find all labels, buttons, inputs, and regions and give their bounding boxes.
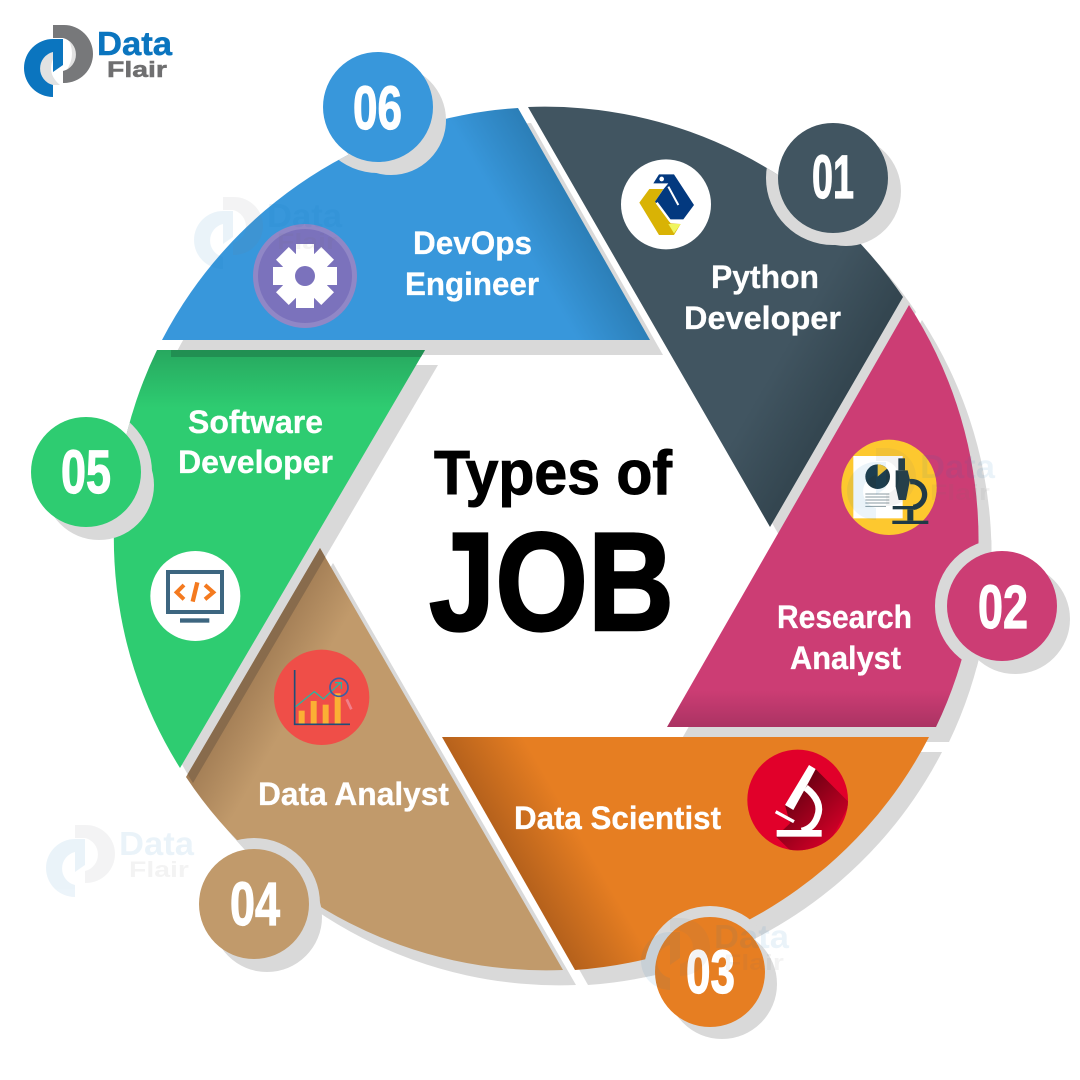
number badge 03 bbox=[644, 906, 777, 1039]
watermark: research bbox=[847, 448, 996, 520]
label: Software Developer: Developer bbox=[178, 444, 333, 480]
label: DevOps Engineer: DevOps bbox=[413, 225, 532, 261]
label: Python Developer: Python bbox=[711, 259, 819, 295]
panel: Data Analyst segment bbox=[186, 548, 563, 970]
number badge 01 bbox=[766, 111, 901, 246]
label: Software Developer bbox=[178, 404, 333, 480]
title: JOB bbox=[429, 503, 674, 660]
panel: DevOps Engineer segment bbox=[162, 108, 650, 340]
number badge 06 bbox=[323, 52, 446, 175]
number badge 05 bbox=[31, 417, 154, 540]
watermark: lower left: Flair bbox=[129, 857, 190, 882]
label: Software Developer: Software bbox=[188, 404, 323, 440]
watermark: lower left bbox=[46, 825, 195, 897]
number badge 02: 02 bbox=[978, 573, 1028, 641]
watermark: research: Flair bbox=[930, 480, 991, 505]
number badge 03: 03 bbox=[686, 938, 735, 1006]
watermark: research: Data bbox=[920, 448, 996, 485]
panel: Python Developer segment bbox=[528, 107, 903, 527]
watermark: DevOps bbox=[194, 197, 343, 269]
number badge 04: 04 bbox=[230, 870, 280, 938]
watermark: DevOps: Data bbox=[267, 197, 343, 234]
watermark: badge 03: Flair bbox=[724, 950, 785, 975]
icon: report and microscope bbox=[841, 440, 937, 535]
panel: Data Scientist segment bbox=[442, 737, 929, 970]
label: Python Developer: Developer bbox=[684, 300, 841, 336]
watermark: badge 03 bbox=[641, 918, 790, 990]
panel: Software Developer segment bbox=[114, 350, 431, 768]
icon: microscope on red circle bbox=[747, 750, 850, 855]
number badge 01: 01 bbox=[812, 143, 854, 211]
number badge 05: 05 bbox=[61, 438, 111, 506]
logo: DataFlair: Flair bbox=[107, 57, 168, 82]
panel: Research Analyst segment bbox=[667, 305, 979, 727]
label: DevOps Engineer bbox=[405, 225, 539, 302]
watermark: DevOps: Flair bbox=[277, 229, 338, 254]
label: Research Analyst: Research bbox=[777, 599, 912, 635]
number badge 06: 06 bbox=[353, 74, 402, 142]
logo: DataFlair: Data bbox=[97, 25, 173, 62]
icon: gear on purple circle bbox=[253, 224, 357, 328]
label: Python Developer bbox=[684, 259, 841, 336]
label: Research Analyst bbox=[777, 599, 912, 676]
logo: DataFlair bbox=[24, 25, 173, 97]
icon: code monitor bbox=[150, 551, 240, 641]
title: Types of bbox=[434, 439, 672, 508]
label: DevOps Engineer: Engineer bbox=[405, 266, 539, 302]
watermark: lower left: Data bbox=[119, 825, 195, 862]
segment shadows bbox=[127, 122, 992, 985]
label: Data Scientist: Data Scientist bbox=[514, 800, 721, 836]
label: Research Analyst: Analyst bbox=[790, 640, 901, 676]
icon: python logo bbox=[621, 159, 711, 249]
number badge 04 bbox=[188, 838, 322, 972]
watermark: badge 03: Data bbox=[714, 918, 790, 955]
label: Data Analyst: Data Analyst bbox=[258, 776, 449, 812]
icon: analytics chart on red circle bbox=[274, 650, 369, 745]
title bbox=[429, 439, 674, 660]
number badge 02 bbox=[935, 539, 1070, 674]
